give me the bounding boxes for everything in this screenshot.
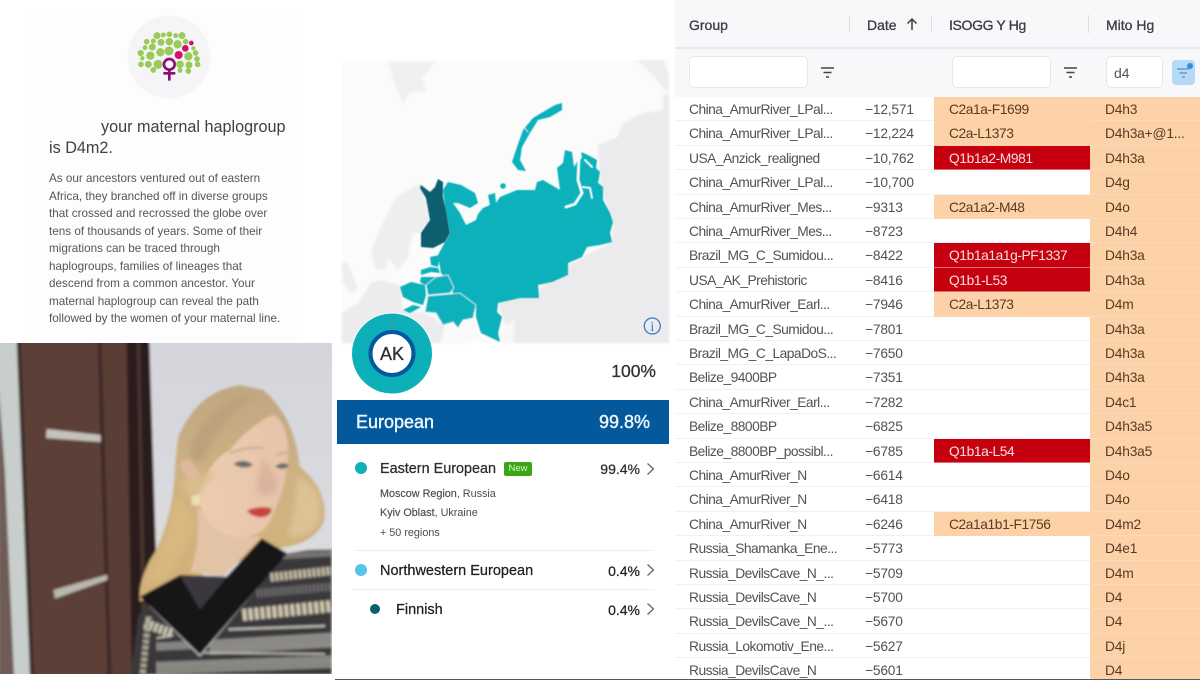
- table: ancient samples: [675, 0, 1200, 679]
- text block: haplogroup explanation: tens of thousands of years. Some of their: [49, 224, 262, 238]
- panel: ancestry map: [342, 60, 669, 343]
- table row 6: D4h4: [1105, 224, 1137, 239]
- legend dot teal: [355, 462, 367, 474]
- table row 19: D4e1: [1105, 541, 1137, 556]
- text block: haplogroup explanation: maternal haplogroup can reveal the path: [49, 294, 259, 308]
- value: 0.4%: [608, 563, 640, 579]
- column headings: ISOGG Y Hg: [949, 17, 1026, 33]
- heading: maternal haplogroup: [49, 118, 285, 157]
- table row 5: D4o: [1105, 200, 1130, 215]
- table row 10: [675, 317, 1200, 341]
- text block: haplogroup explanation: Africa, they branched off in diverse groups: [49, 190, 268, 202]
- table row 9: −7946: [865, 297, 903, 312]
- table row 18: China_AmurRiver_N: [689, 517, 807, 532]
- table row 11: −7650: [865, 346, 903, 361]
- icon: AK ancestry donut: [352, 312, 432, 394]
- table row 15: Q1b1a-L54: [949, 444, 1014, 459]
- icon: sort arrow: [907, 18, 917, 30]
- icon: AK ancestry donut: AK: [380, 344, 404, 364]
- filter input: mito haplogroup d4: [1106, 56, 1163, 88]
- value: 99.4%: [600, 461, 640, 477]
- table row 1: −12,571: [865, 102, 914, 117]
- table row 9: China_AmurRiver_Earl...: [689, 297, 830, 312]
- gulfs and river mouths: [524, 127, 592, 207]
- grey land masses: [341, 60, 669, 343]
- table row 18: [675, 512, 1200, 536]
- total percentage: 100%: [611, 361, 656, 381]
- table row 1: C2a1a-F1699: [949, 102, 1029, 117]
- table row 22: −5670: [865, 614, 903, 629]
- table row 22: Russia_DevilsCave_N_...: [689, 614, 833, 629]
- table row 2: D4h3a+@1...: [1105, 126, 1185, 141]
- table row 20: −5709: [865, 566, 903, 581]
- table row 11: D4h3a: [1105, 346, 1145, 361]
- table row 6: [675, 219, 1200, 243]
- table row 14: Belize_8800BP: [689, 419, 777, 434]
- table row 7: −8422: [865, 248, 903, 263]
- table row 22: [675, 609, 1200, 634]
- table row 17: China_AmurRiver_N: [689, 492, 807, 507]
- table row 2: China_AmurRiver_LPal...: [689, 126, 833, 141]
- table row 3: USA_Anzick_realigned: [689, 151, 820, 166]
- table row 21: Russia_DevilsCave_N: [689, 590, 816, 605]
- column headings: Date: [867, 17, 897, 33]
- badge: New: New: [508, 463, 528, 474]
- table row 5: C2a1a2-M48: [949, 200, 1025, 215]
- table row 12: [675, 365, 1200, 390]
- row: Northwestern European: [355, 563, 654, 579]
- table row 17: [675, 487, 1200, 512]
- table row 21: −5700: [865, 590, 903, 605]
- table row 7: Q1b1a1a1g-PF1337: [949, 248, 1067, 263]
- Russia and Eastern Europe regions: [400, 103, 613, 342]
- table row 7: D4h3a: [1105, 248, 1145, 263]
- row: Finnish: [370, 602, 654, 618]
- table row 2: −12,224: [865, 126, 914, 141]
- table row 13: China_AmurRiver_Earl...: [689, 395, 830, 410]
- table row 23: −5627: [865, 639, 903, 654]
- table row 1: [675, 97, 1200, 121]
- table row 5: China_AmurRiver_Mes...: [689, 200, 832, 215]
- table row 6: China_AmurRiver_Mes...: [689, 224, 832, 239]
- table row 16: D4o: [1105, 468, 1130, 483]
- filter input: mito haplogroup d4: d4: [1114, 65, 1130, 81]
- table row 16: [675, 463, 1200, 487]
- table row 17: −6418: [865, 492, 903, 507]
- table row 14: −6825: [865, 419, 903, 434]
- table row 14: [675, 414, 1200, 439]
- legend dot dark teal: [370, 604, 380, 614]
- table row 8: [675, 268, 1200, 292]
- table row 15: −6785: [865, 444, 903, 459]
- text block: haplogroup explanation: migrations can be traced through: [49, 242, 220, 255]
- table row 8: −8416: [865, 273, 903, 288]
- regions: Kyiv Oblast, Ukraine: [380, 507, 478, 519]
- table row 2: C2a-L1373: [949, 126, 1014, 141]
- table row 24: Russia_DevilsCave_N: [689, 663, 816, 678]
- table row 18: D4m2: [1105, 517, 1141, 532]
- table row 9: [675, 292, 1200, 317]
- table row 18: C2a1a1b1-F1756: [949, 517, 1051, 532]
- table row 7: [675, 243, 1200, 268]
- table row 10: Brazil_MG_C_Sumidou...: [689, 322, 833, 337]
- label: Finnish: [396, 602, 443, 618]
- info icon: i: [650, 320, 654, 335]
- table row 17: D4o: [1105, 492, 1130, 507]
- table row 18: −6246: [865, 517, 903, 532]
- table row 12: D4h3a: [1105, 370, 1145, 385]
- table row 11: [675, 341, 1200, 365]
- table row 11: Brazil_MG_C_LapaDoS...: [689, 346, 836, 361]
- text block: haplogroup explanation: followed by the women of your maternal line.: [49, 312, 280, 325]
- label: Eastern European: [380, 461, 496, 477]
- table row 20: D4m: [1105, 566, 1134, 581]
- table row 8: Q1b1-L53: [949, 273, 1007, 288]
- table row 13: D4c1: [1105, 395, 1136, 410]
- text block: haplogroup explanation: As our ancestors ventured out of eastern: [49, 172, 260, 185]
- table row 4: D4g: [1105, 175, 1130, 190]
- table row 15: Belize_8800BP_possibl...: [689, 444, 833, 459]
- table row 15: D4h3a5: [1105, 444, 1152, 459]
- heading: maternal haplogroup: is D4m2.: [49, 139, 113, 157]
- table row 19: Russia_Shamanka_Ene...: [689, 541, 837, 556]
- table row 6: −8723: [865, 224, 903, 239]
- table row 1: China_AmurRiver_LPal...: [689, 102, 833, 117]
- row: Eastern European: [355, 461, 654, 539]
- table row 4: −10,700: [865, 175, 914, 190]
- table row 14: D4h3a5: [1105, 419, 1152, 434]
- chevron: [647, 463, 654, 475]
- table row 10: D4h3a: [1105, 322, 1145, 337]
- filter input: Y haplogroup: [952, 56, 1051, 88]
- table row 21: [675, 585, 1200, 609]
- banner: European: [337, 400, 669, 444]
- table row 2: [675, 121, 1200, 146]
- column headings: [689, 15, 1154, 34]
- table row 23: Russia_Lokomotiv_Ene...: [689, 639, 834, 654]
- table row 12: Belize_9400BP: [689, 370, 777, 385]
- text block: haplogroup explanation: haplogroups, families of lineages that: [49, 260, 242, 272]
- table row 3: −10,762: [865, 151, 914, 166]
- icon: maternal tree logo: [138, 32, 200, 81]
- legend dot light blue: [355, 564, 367, 576]
- table row 13: [675, 390, 1200, 414]
- table row 22: D4: [1105, 614, 1122, 629]
- table header background: [675, 0, 1200, 97]
- table row 20: [675, 561, 1200, 585]
- table row 9: D4m: [1105, 297, 1134, 312]
- table row 3: D4h3a: [1105, 151, 1145, 166]
- table row 23: D4j: [1105, 639, 1125, 654]
- table row 19: −5773: [865, 541, 903, 556]
- table row 13: −7282: [865, 395, 903, 410]
- text block: haplogroup explanation: that crossed and recrossed the globe over: [49, 207, 267, 220]
- chevron: [647, 564, 654, 576]
- panel: maternal haplogroup: [30, 8, 302, 340]
- filter input: group: [689, 56, 808, 88]
- table row 19: [675, 536, 1200, 561]
- Finland highlighted: [420, 179, 450, 248]
- table row 4: China_AmurRiver_LPal...: [689, 175, 833, 190]
- table row 5: −9313: [865, 200, 903, 215]
- regions: Moscow Region, Russia: [380, 488, 496, 500]
- table row 15: [675, 439, 1200, 463]
- column headings: Group: [689, 17, 728, 33]
- heading: maternal haplogroup: your maternal haplogroup: [101, 118, 285, 136]
- text block: haplogroup explanation: [49, 172, 280, 325]
- regions: [380, 488, 496, 539]
- table row 10: −7801: [865, 322, 903, 337]
- table row 20: Russia_DevilsCave_N_...: [689, 566, 833, 581]
- table row 8: USA_AK_Prehistoric: [689, 273, 807, 288]
- banner: European: European: [356, 412, 434, 432]
- label: Northwestern European: [380, 563, 533, 579]
- table row 4: [675, 170, 1200, 195]
- chevron: [647, 603, 654, 615]
- table row 24: D4: [1105, 663, 1122, 678]
- table row 23: [675, 634, 1200, 658]
- icon: filter Y haplogroup: [1064, 67, 1077, 78]
- icon: filter group: [821, 67, 834, 78]
- table row 9: C2a-L1373: [949, 297, 1014, 312]
- banner: European: 99.8%: [599, 412, 650, 432]
- table row 3: Q1b1a2-M981: [949, 151, 1033, 166]
- table row 12: −7351: [865, 370, 903, 385]
- table row 24: −5601: [865, 663, 903, 678]
- info icon: [644, 318, 660, 335]
- photo: woman with blonde hair beside a door: [0, 343, 332, 674]
- regions: + 50 regions: [380, 527, 440, 539]
- table row 16: China_AmurRiver_N: [689, 468, 807, 483]
- table row 8: D4h3a: [1105, 273, 1145, 288]
- table row 3: [675, 146, 1200, 170]
- table row 5: [675, 195, 1200, 219]
- value: 0.4%: [608, 602, 640, 618]
- text block: haplogroup explanation: descend from a common ancestor. Your: [49, 277, 255, 290]
- table row 7: Brazil_MG_C_Sumidou...: [689, 248, 833, 263]
- table row 21: D4: [1105, 590, 1122, 605]
- table row 1: D4h3: [1105, 102, 1137, 117]
- table row 24: [675, 658, 1200, 680]
- table row 16: −6614: [865, 468, 903, 483]
- column headings: Mito Hg: [1106, 17, 1154, 33]
- icon: active filter button: [1172, 60, 1195, 85]
- badge: New: [504, 462, 532, 476]
